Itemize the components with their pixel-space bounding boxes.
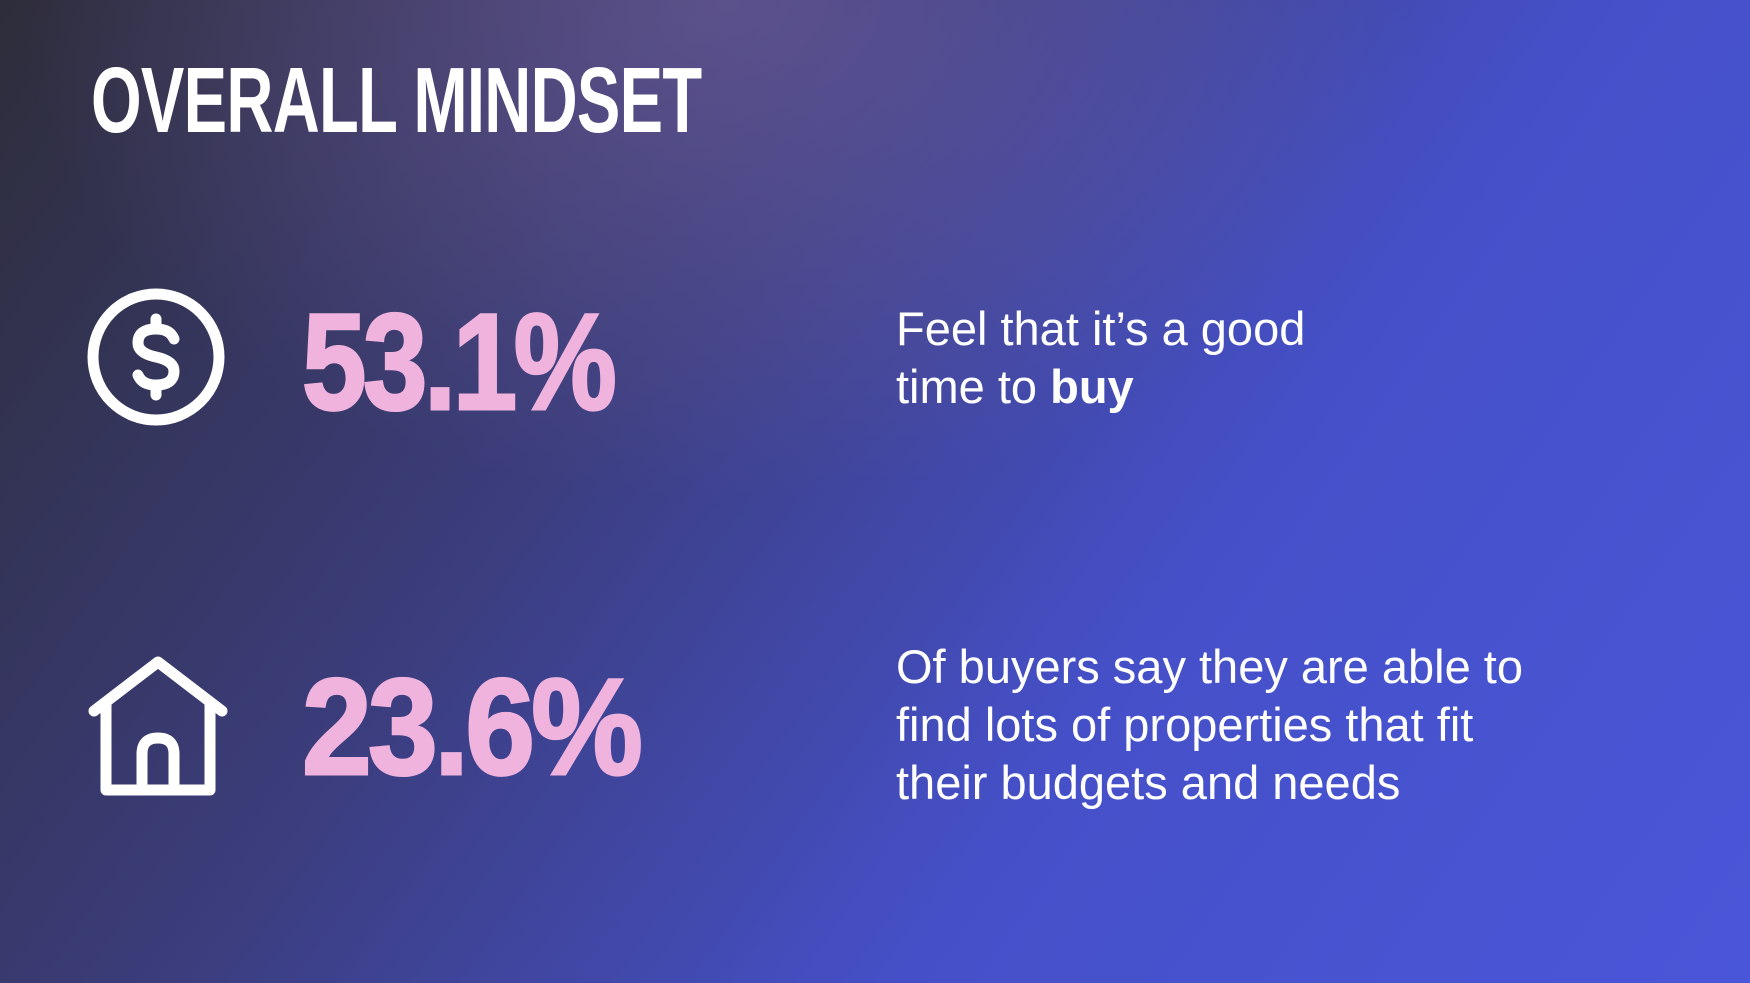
stat 2 text: Of buyers say they are able to <box>896 640 1523 693</box>
stat 2 text: their budgets and needs <box>896 756 1400 809</box>
stat 1 text: Feel that it’s a good <box>896 302 1305 355</box>
stat 2 text <box>896 640 1523 809</box>
icon: house <box>88 656 228 796</box>
stat 1 text <box>896 302 1305 413</box>
stat 1 number: 53.1% <box>302 286 613 439</box>
stat 1 text: time to buy <box>896 360 1134 413</box>
stat 2 number: 23.6% <box>302 651 639 804</box>
stat 2 text: find lots of properties that fit <box>896 698 1473 751</box>
title: OVERALL MINDSET <box>91 48 701 152</box>
icon: dollar circle <box>88 288 224 426</box>
